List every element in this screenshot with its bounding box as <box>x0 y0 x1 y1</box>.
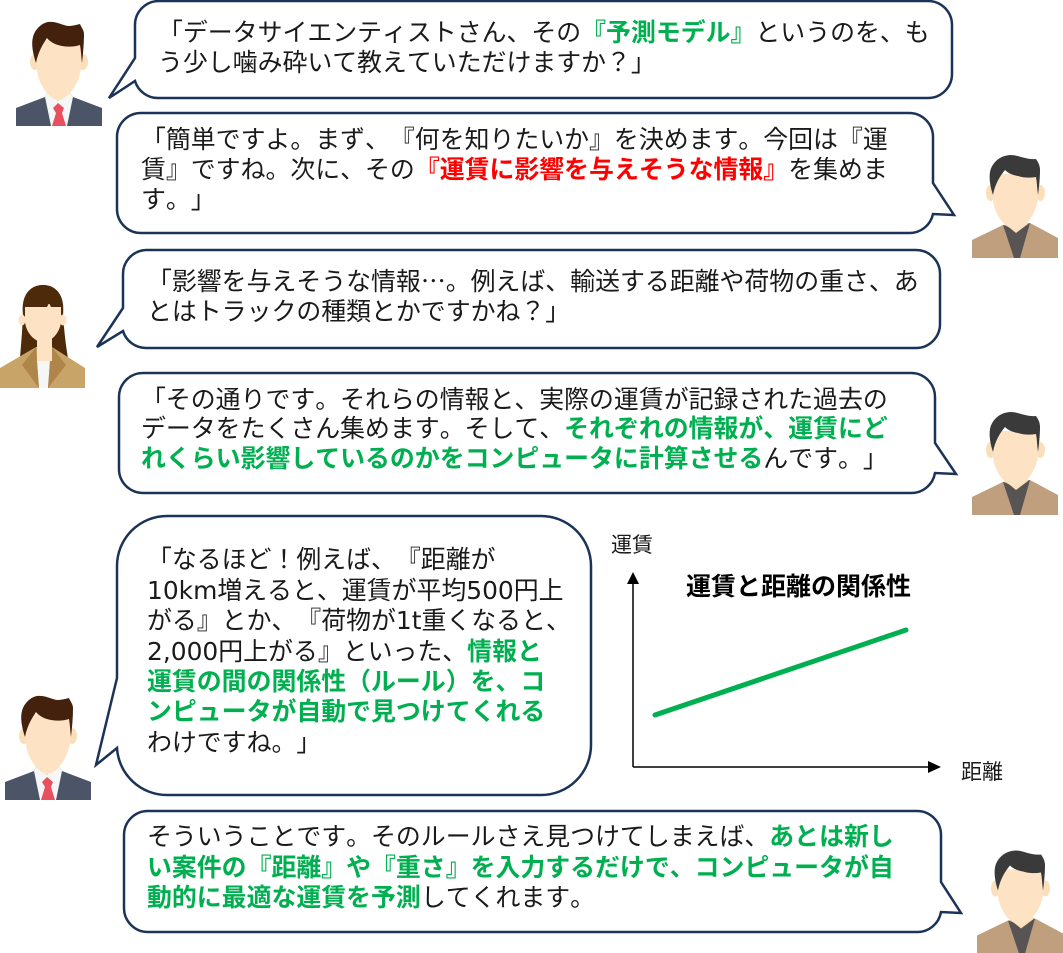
speech bubble 1 <box>109 1 952 98</box>
y axis arrow <box>627 572 639 767</box>
speech bubble 5: 運賃の間の関係性（ルール）を、コ <box>147 667 545 696</box>
speech bubble 6 <box>124 811 961 932</box>
speech bubble 4: れくらい影響しているのかをコンピュータに計算させるんです。」 <box>141 444 888 473</box>
icon: man in brown jacket 3 <box>977 850 1063 953</box>
speech bubble 4: データをたくさん集めます。そして、それぞれの情報が、運賃にど <box>141 414 888 443</box>
icon: man in brown jacket 1 <box>972 155 1058 258</box>
speech bubble 6: 動的に最適な運賃を予測してくれます。 <box>147 883 595 912</box>
speech bubble 5: 「なるほど！例えば、『距離が <box>147 545 496 574</box>
chart title: 運賃と距離の関係性 <box>686 572 911 601</box>
speech bubble 5: がる』とか、『荷物が1t重くなると、 <box>147 606 571 635</box>
speech bubble 6: そういうことです。そのルールさえ見つけてしまえば、あとは新し <box>147 822 894 851</box>
icon: woman in tan jacket <box>0 285 85 388</box>
speech bubble 1: う少し噛み砕いて教えていただけますか？」 <box>158 48 656 77</box>
speech bubble 5: 2,000円上がる』といった、情報と <box>147 637 542 666</box>
x axis label: 距離 <box>961 760 1003 784</box>
speech bubble 5: わけですね。」 <box>147 728 321 757</box>
speech bubble 1: 「データサイエンティストさん、その『予測モデル』というのを、も <box>158 18 930 47</box>
icon: man in brown jacket 2 <box>972 412 1058 515</box>
speech bubble 2: 「簡単ですよ。まず、『何を知りたいか』を決めます。今回は『運 <box>141 125 888 154</box>
speech bubble 6: い案件の『距離』や『重さ』を入力するだけで、コンピュータが自 <box>147 853 894 882</box>
speech bubble 3: とはトラックの種類とかですかね？」 <box>147 297 570 326</box>
speech bubble 4 <box>119 373 956 493</box>
speech bubble 5: 10km増えると、運賃が平均500円上 <box>147 576 564 605</box>
speech bubble 5 <box>96 516 591 795</box>
trend line <box>655 630 906 715</box>
speech bubble 2 <box>117 113 954 233</box>
speech bubble 3 <box>97 250 940 348</box>
speech bubble 5: ンピュータが自動で見つけてくれる <box>147 697 545 726</box>
icon: man in suit, top left <box>16 22 102 126</box>
y axis label: 運賃 <box>611 533 653 557</box>
icon: man in suit, lower left <box>5 696 91 800</box>
speech bubble 4: 「その通りです。それらの情報と、実際の運賃が記録された過去の <box>141 385 888 414</box>
speech bubble 2: 賃』ですね。次に、その『運賃に影響を与えそうな情報』を集めま <box>141 155 888 184</box>
x axis arrow <box>633 761 941 773</box>
speech bubble 2: す。」 <box>141 185 216 214</box>
speech bubble 3: 「影響を与えそうな情報…。例えば、輸送する距離や荷物の重さ、あ <box>147 262 919 298</box>
line chart: fare vs distance <box>611 533 1003 784</box>
